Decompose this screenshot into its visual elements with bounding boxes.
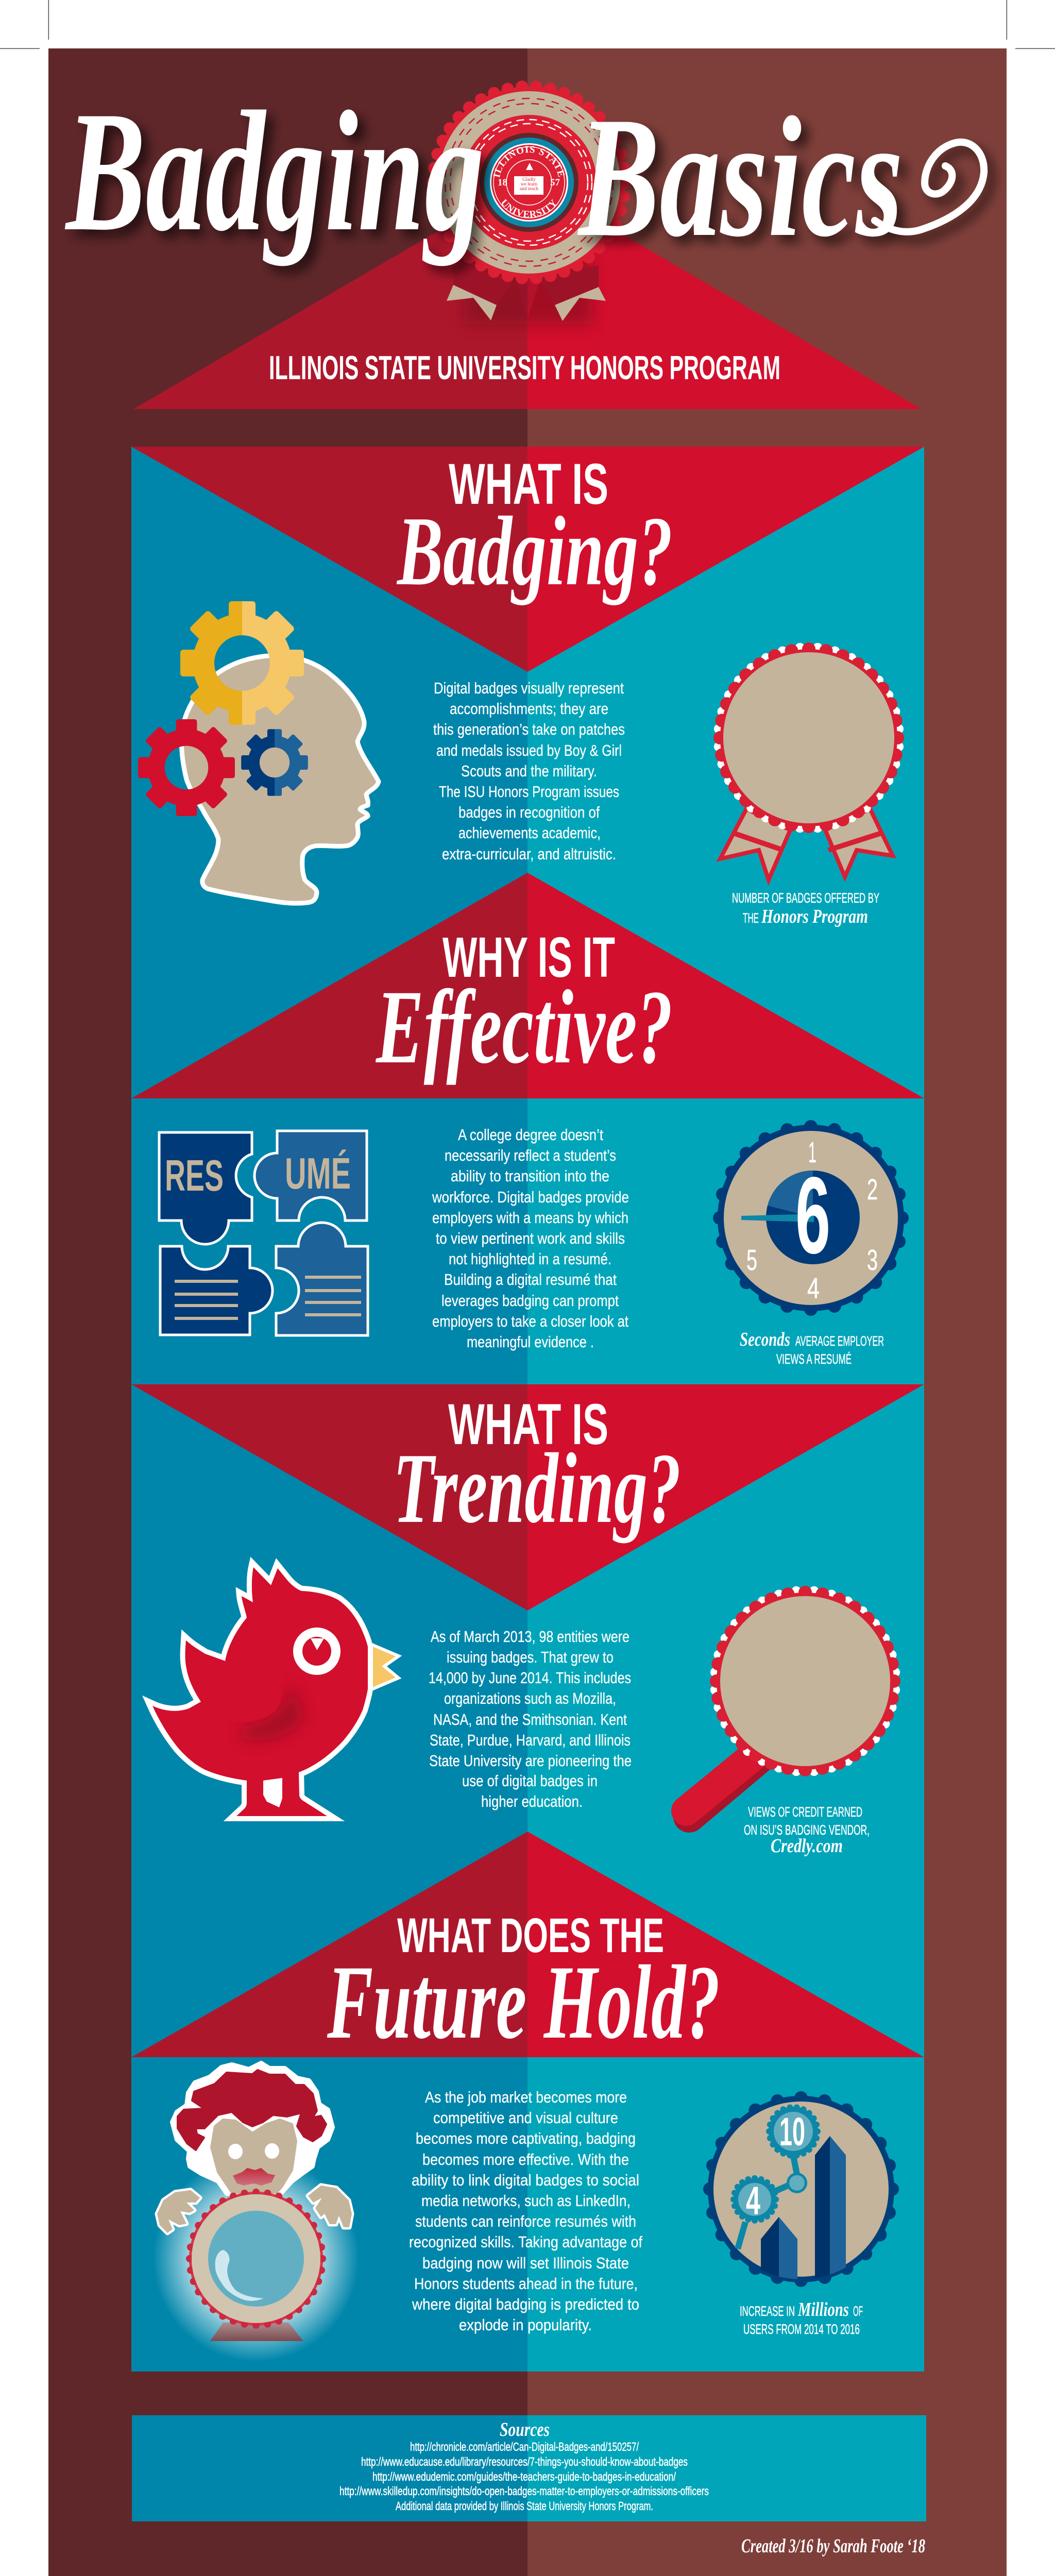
title: Badging bbox=[64, 76, 484, 267]
hair bbox=[178, 2070, 326, 2150]
body text: future: competitive and visual culture bbox=[433, 2109, 618, 2127]
university seal: we learn bbox=[521, 182, 537, 187]
head bbox=[181, 655, 379, 903]
body text: what is badging: Scouts and the military. bbox=[461, 762, 597, 780]
marker ten bbox=[769, 2107, 818, 2156]
university seal: and teach bbox=[520, 187, 538, 192]
body text: why effective: Building a digital resumé that bbox=[444, 1270, 617, 1289]
header triangle bbox=[133, 179, 922, 409]
body text: what is badging: extra-curricular, and altruistic. bbox=[442, 845, 616, 863]
marker four: 4 bbox=[746, 2179, 760, 2223]
clock hand bbox=[741, 1214, 814, 1222]
teal content panel bbox=[131, 447, 924, 2371]
body text: what is badging: The ISU Honors Program issues bbox=[439, 783, 619, 801]
caption: credly views: Credly.com bbox=[771, 1835, 843, 1857]
marker mid dot bbox=[787, 2173, 807, 2193]
body text: what is badging bbox=[433, 679, 625, 863]
title: Basics bbox=[576, 81, 903, 273]
credit line: Created 3/16 by Sarah Foote ‘18 bbox=[741, 2535, 925, 2557]
body text: why effective: leverages badging can prompt bbox=[441, 1292, 619, 1310]
body text: future: becomes more effective. With the bbox=[422, 2150, 629, 2168]
clock numbers: 2 bbox=[867, 1173, 878, 1206]
caption: number of badges: THE bbox=[743, 910, 759, 926]
caption: number of badges: Honors Program bbox=[761, 906, 868, 927]
body text: trending: State University are pioneering the bbox=[429, 1752, 632, 1770]
body text: trending: NASA, and the Smithsonian. Kent bbox=[433, 1710, 627, 1728]
puzzle piece: bottom right bbox=[276, 1223, 368, 1335]
title swash bbox=[875, 142, 984, 232]
body text: trending: higher education. bbox=[481, 1792, 583, 1810]
wing shadow bbox=[242, 1682, 304, 1740]
clock numbers bbox=[746, 1136, 878, 1305]
wing bbox=[185, 1640, 283, 1722]
source links: http://www.educause.edu/library/resources/7-things-you-should-know-about-badges bbox=[361, 2455, 688, 2468]
caption: credly views bbox=[744, 1804, 870, 1857]
caption: seconds: VIEWS A RESUMÉ bbox=[776, 1351, 852, 1367]
body text: what is badging: accomplishments; they are bbox=[450, 700, 608, 718]
body text: what is badging: Digital badges visually represent bbox=[434, 679, 624, 697]
caption: increase in millions bbox=[740, 2299, 863, 2337]
body text: why effective: employers to take a closer look at bbox=[432, 1312, 628, 1330]
beak bbox=[368, 1645, 396, 1689]
puzzle piece: top left bbox=[159, 1132, 252, 1244]
heading: WHAT IS bbox=[448, 1392, 608, 1456]
icon: growth chart badge bbox=[708, 2096, 894, 2282]
caption: credly views: ON ISU’S BADGING VENDOR, bbox=[744, 1822, 870, 1838]
caption: increase in millions: OF bbox=[853, 2303, 863, 2319]
icon: six second clock bbox=[718, 1125, 904, 1311]
university seal bbox=[490, 143, 568, 222]
icon: fortune teller with crystal ball bbox=[153, 2063, 359, 2362]
left hand bbox=[157, 2190, 200, 2233]
title bbox=[64, 76, 984, 273]
body text: future: As the job market becomes more bbox=[425, 2088, 627, 2106]
body text: trending: organizations such as Mozilla, bbox=[444, 1689, 616, 1707]
body text: why effective: ability to transition into the bbox=[451, 1167, 609, 1185]
body text: what is badging: achievements academic, bbox=[458, 824, 601, 842]
heading: WHY IS IT bbox=[443, 926, 615, 989]
caption: increase in millions: Millions bbox=[797, 2299, 849, 2320]
puzzle lines bbox=[175, 1276, 361, 1320]
body text: what is badging: and medals issued by Boy & Girl bbox=[436, 741, 622, 759]
panel: sources bbox=[132, 2415, 926, 2521]
source links: http://www.edudemic.com/guides/the-teachers-guide-to-badges-in-education/ bbox=[372, 2470, 676, 2483]
body text: why effective: not highlighted in a resumé. bbox=[449, 1250, 611, 1268]
banner: what is trending bbox=[131, 1384, 924, 1611]
icon: magnifying glass bbox=[686, 1590, 896, 1817]
caption: seconds bbox=[740, 1329, 884, 1367]
clock six: 6 bbox=[795, 1154, 830, 1276]
body text: trending: 14,000 by June 2014. This includes bbox=[429, 1669, 631, 1687]
body text: trending: As of March 2013, 98 entities were bbox=[431, 1628, 629, 1646]
subtitle: ILLINOIS STATE UNIVERSITY HONORS PROGRAM bbox=[269, 349, 780, 386]
marker ten: 10 bbox=[779, 2110, 805, 2154]
caption: increase in millions: INCREASE IN bbox=[740, 2303, 795, 2319]
body text: why effective: meaningful evidence . bbox=[467, 1333, 594, 1351]
body text: future: ability to link digital badges to social bbox=[412, 2171, 639, 2189]
rosette badge with university seal bbox=[427, 80, 631, 331]
clock numbers: 1 bbox=[808, 1136, 816, 1169]
heading: WHAT DOES THE bbox=[397, 1908, 664, 1963]
puzzle text: RES bbox=[165, 1151, 224, 1200]
source links bbox=[339, 2440, 709, 2513]
bird eye bbox=[293, 1628, 341, 1675]
source links: http://chronicle.com/article/Can-Digital-Badges-and/150257/ bbox=[410, 2440, 639, 2453]
banner: what is badging bbox=[131, 447, 924, 672]
marker four bbox=[734, 2178, 776, 2223]
right hand bbox=[308, 2185, 352, 2227]
body text: future: explode in popularity. bbox=[459, 2316, 592, 2334]
body text: trending bbox=[429, 1628, 632, 1810]
body text: trending: State, Purdue, Harvard, and Illinois bbox=[430, 1731, 631, 1749]
connectors bbox=[738, 2156, 797, 2249]
ball base bbox=[210, 2323, 303, 2341]
body text: future: students can reinforce resumés with bbox=[415, 2212, 636, 2230]
icon: resume puzzle bbox=[159, 1131, 368, 1335]
body text: trending: use of digital badges in bbox=[462, 1772, 598, 1790]
clock numbers: 3 bbox=[867, 1244, 878, 1277]
rosette shadow bbox=[464, 258, 592, 325]
banner: future: Future Hold? bbox=[327, 1944, 720, 2061]
clock numbers: 4 bbox=[807, 1272, 820, 1305]
source links: Additional data provided by Illinois State University Honors Program. bbox=[396, 2499, 653, 2513]
handle bbox=[689, 1757, 760, 1817]
university seal: 18 bbox=[498, 177, 507, 188]
body text: why effective bbox=[432, 1126, 629, 1351]
mouth bbox=[233, 2168, 275, 2185]
icon: head with gears bbox=[138, 601, 379, 903]
caption: number of badges: NUMBER OF BADGES OFFERED BY bbox=[732, 890, 879, 906]
body text: future: recognized skills. Taking advantage of bbox=[409, 2233, 642, 2251]
body text: why effective: to view pertinent work and skills bbox=[436, 1229, 625, 1247]
puzzle piece: bottom left bbox=[160, 1246, 273, 1335]
caption: number of badges bbox=[732, 890, 879, 927]
caption: credly views: VIEWS OF CREDIT EARNED bbox=[748, 1804, 862, 1820]
body text: future: where digital badging is predicted to bbox=[412, 2295, 639, 2313]
university seal: UNIVERSITY bbox=[502, 199, 556, 217]
banner: why is it effective: Effective? bbox=[376, 969, 673, 1086]
body text: why effective: employers with a means by which bbox=[432, 1209, 628, 1227]
body text: why effective: workforce. Digital badges provide bbox=[432, 1188, 629, 1206]
banner: future bbox=[131, 1832, 924, 2061]
caption: seconds: Seconds bbox=[740, 1329, 790, 1350]
body text: trending: issuing badges. That grew to bbox=[447, 1648, 614, 1666]
body text: what is badging: badges in recognition of bbox=[458, 803, 600, 821]
crystal ball bbox=[189, 2192, 323, 2326]
body text: why effective: necessarily reflect a student’s bbox=[445, 1146, 616, 1164]
bird body bbox=[152, 1567, 368, 1816]
icon: resume puzzle: UMÉ bbox=[285, 1149, 351, 1198]
chart bars bbox=[761, 2136, 846, 2282]
university seal: ILLINOIS STATE bbox=[494, 146, 565, 178]
puzzle piece: top right bbox=[254, 1131, 367, 1221]
face bbox=[211, 2120, 296, 2193]
body text: future: badging now will set Illinois State bbox=[422, 2254, 629, 2272]
body text: what is badging: this generation’s take on patches bbox=[433, 720, 625, 738]
university seal: 57 bbox=[550, 177, 560, 188]
heading: WHAT IS bbox=[449, 452, 608, 516]
banner: what is trending: Trending? bbox=[393, 1433, 681, 1544]
body text: future: becomes more captivating, badging bbox=[416, 2129, 636, 2147]
hair outline bbox=[172, 2063, 333, 2194]
blue gear bbox=[241, 729, 308, 796]
bird leg stripe bbox=[263, 1778, 282, 1807]
banner: why is it effective bbox=[131, 873, 924, 1098]
ribbons bbox=[720, 809, 790, 880]
clock numbers: 5 bbox=[746, 1244, 757, 1277]
caption: increase in millions: USERS FROM 2014 TO 2016 bbox=[743, 2321, 860, 2337]
banner: what is badging: Badging? bbox=[397, 496, 673, 606]
rosette ribbons bbox=[447, 265, 606, 321]
university seal: Gladly bbox=[522, 177, 536, 182]
sources heading: Sources bbox=[500, 2419, 550, 2441]
eyes bbox=[228, 2144, 243, 2159]
ball glow bbox=[153, 2156, 359, 2362]
ball highlight bbox=[215, 2250, 264, 2301]
icon: medal with ribbons bbox=[718, 647, 899, 880]
caption: seconds: AVERAGE EMPLOYER bbox=[795, 1333, 884, 1349]
icon: red bird bbox=[152, 1567, 396, 1816]
body text: future: Honors students ahead in the future, bbox=[414, 2275, 638, 2293]
red gear bbox=[138, 719, 235, 816]
source links: http://www.skilledup.com/insights/do-open-badges-matter-to-employers-or-admissions-officers bbox=[339, 2484, 709, 2498]
yellow gear bbox=[180, 601, 304, 725]
body text: future: media networks, such as LinkedIn, bbox=[421, 2192, 631, 2210]
body text: why effective: A college degree doesn’t bbox=[458, 1126, 603, 1144]
body text: future bbox=[409, 2088, 642, 2334]
